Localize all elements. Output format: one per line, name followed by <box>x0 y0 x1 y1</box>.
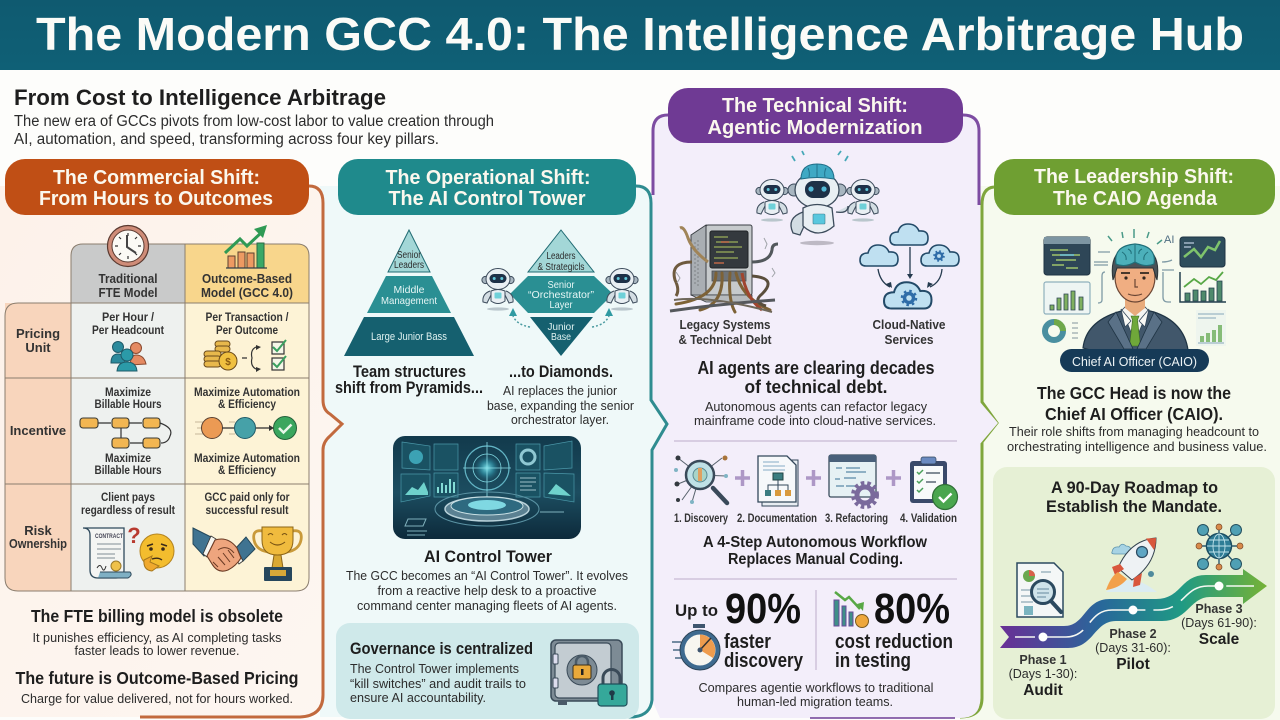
phase 2 label <box>1095 627 1171 673</box>
commercial heading pill: The Commercial Shift: <box>53 166 260 189</box>
icon: robot right <box>606 268 638 311</box>
outcome-based pricing text <box>16 668 298 706</box>
row labels: Risk <box>24 523 52 538</box>
icon: growth chart <box>225 225 267 268</box>
chart: team pyramid: Middle <box>394 284 425 296</box>
CAIO badge <box>1060 349 1209 372</box>
leadership heading pill: The Leadership Shift: <box>1034 165 1234 188</box>
control tower text: from a reactive help desk to a proactive <box>378 583 596 598</box>
chart: team pyramid <box>344 230 474 356</box>
row: incentive <box>80 385 300 477</box>
row: risk ownership: Client pays <box>101 490 155 504</box>
callout: governance: “kill switches” and audit trails to <box>350 676 526 691</box>
icon: audit document <box>1017 563 1063 617</box>
intro text: The new era of GCCs pivots from low-cost labor to value creation through <box>14 113 494 130</box>
icon: people <box>111 342 146 371</box>
icon: coins to checks <box>204 340 286 372</box>
pyramid caption: Team structures <box>353 363 466 381</box>
panel: 90-day roadmap <box>993 467 1275 719</box>
icon: documentation <box>758 456 798 506</box>
phase 2 label: Pilot <box>1116 656 1150 673</box>
icon: contract with question mark: ? <box>127 523 141 548</box>
legacy systems label: & Technical Debt <box>678 332 772 347</box>
chart: team diamond with robots: Senior <box>548 279 575 291</box>
chart: team diamond with robots: & Strategicls <box>538 262 584 273</box>
chart: team pyramid: Management <box>381 295 437 307</box>
row labels <box>9 326 67 551</box>
row labels: Ownership <box>9 536 67 551</box>
icon: coins to checks: $ <box>225 357 231 368</box>
row labels: Incentive <box>10 423 66 438</box>
leadership heading pill <box>994 159 1275 215</box>
intro text: From Cost to Intelligence Arbitrage <box>14 85 386 110</box>
technical debt statement <box>694 358 936 428</box>
icon: AI agent robots <box>756 151 879 245</box>
phase 1 label: Audit <box>1023 682 1063 699</box>
operational heading pill <box>338 159 636 215</box>
FTE billing text: It punishes efficiency, as AI completing tasks <box>32 630 282 645</box>
chart: team diamond with robots: Base <box>551 331 571 343</box>
row: risk ownership <box>81 490 301 581</box>
title banner <box>0 0 1280 70</box>
callout: governance: ensure AI accountability. <box>350 690 486 705</box>
row: incentive: Maximize Automation <box>194 451 300 465</box>
chart: team pyramid: Senior <box>397 250 422 261</box>
legacy systems label <box>678 317 772 347</box>
workflow step labels <box>674 513 957 525</box>
illustration: AI control tower <box>393 436 581 539</box>
technical debt statement: AI agents are clearing decades <box>698 358 934 378</box>
diamond caption: AI replaces the junior <box>503 383 618 398</box>
column headers: Traditional <box>98 271 158 286</box>
icon: stopwatch <box>672 624 720 670</box>
row: pricing unit: Per Headcount <box>92 323 164 337</box>
roadmap heading: A 90-Day Roadmap to <box>1051 479 1218 497</box>
CAIO statement <box>1007 383 1267 454</box>
row: incentive: Billable Hours <box>94 463 162 477</box>
control tower text <box>346 547 628 613</box>
chart: team diamond with robots: Junior <box>548 321 575 333</box>
control tower text: AI Control Tower <box>424 547 552 566</box>
icon: clock <box>108 226 148 266</box>
icon: handshake and trophy <box>193 527 301 581</box>
chart: team pyramid: Leaders <box>394 260 424 271</box>
icon: cloud-native services <box>860 224 959 308</box>
illustration: chief AI officer with dashboards: AI <box>1164 234 1174 246</box>
CAIO statement: Their role shifts from managing headcount to <box>1009 424 1259 439</box>
roadmap heading: Establish the Mandate. <box>1046 498 1222 516</box>
icon: rocket <box>1106 538 1157 592</box>
row: pricing unit: Per Transaction / <box>206 310 289 324</box>
technical heading pill: The Technical Shift: <box>722 94 908 117</box>
plus sign <box>735 470 901 486</box>
technical heading pill: Agentic Modernization <box>708 116 922 139</box>
comparison footnote: human-led migration teams. <box>737 694 893 709</box>
chart: team diamond with robots: Layer <box>550 299 573 311</box>
FTE billing text <box>31 606 283 658</box>
panel: operational shift <box>320 159 667 719</box>
column headers <box>98 271 293 300</box>
chart: team diamond with robots <box>482 230 638 356</box>
row: incentive: Maximize <box>105 385 151 399</box>
phase 1 label: Phase 1 <box>1019 653 1067 667</box>
workflow step labels: 3. Refactoring <box>825 513 888 525</box>
phase 3 label: Scale <box>1199 631 1240 648</box>
legacy systems label: Legacy Systems <box>680 317 770 332</box>
operational heading pill: The Operational Shift: <box>386 166 590 189</box>
cloud-native label: Cloud-Native <box>872 317 946 332</box>
column headers: Outcome-Based <box>202 271 292 286</box>
pyramid caption <box>335 363 483 397</box>
stat: 80 percent cost reduction: 80% <box>874 585 950 633</box>
row: risk ownership: regardless of result <box>81 503 175 517</box>
commercial heading pill <box>5 159 309 215</box>
outcome-based pricing text: Charge for value delivered, not for hours worked. <box>21 691 293 706</box>
workflow step labels: 2. Documentation <box>737 513 817 525</box>
stat: 80 percent cost reduction: in testing <box>835 649 911 672</box>
icon: refactoring <box>829 455 877 507</box>
panel: technical shift <box>652 88 998 718</box>
stat: 90 percent faster discovery <box>672 585 803 672</box>
pyramid caption: shift from Pyramids... <box>335 379 483 397</box>
panel: leadership shift <box>960 159 1280 720</box>
diamond caption <box>487 363 635 427</box>
icon: robot left <box>482 268 514 311</box>
technical debt statement: of technical debt. <box>744 377 888 397</box>
row: pricing unit: Per Outcome <box>216 323 278 337</box>
title banner: The Modern GCC 4.0: The Intelligence Arbitrage Hub <box>36 8 1244 60</box>
chart: team diamond with robots: “Orchestrator” <box>528 290 594 301</box>
roadmap heading <box>1046 479 1222 516</box>
icon: contract with question mark <box>83 523 174 578</box>
intro text: AI, automation, and speed, transforming across four key pillars. <box>14 131 439 148</box>
comparison footnote <box>698 680 934 709</box>
icon: discovery magnifier <box>674 456 728 504</box>
roadmap arrow ribbon <box>1000 569 1267 648</box>
icon: safe with padlocks <box>551 640 627 706</box>
technical debt statement: mainframe code into cloud-native services. <box>694 413 936 428</box>
CAIO statement: Chief AI Officer (CAIO). <box>1045 404 1223 424</box>
row: incentive: Maximize Automation <box>194 385 300 399</box>
diamond caption: ...to Diamonds. <box>509 363 613 381</box>
phase 1 label <box>1009 653 1077 699</box>
stat: 90 percent faster discovery: Up to <box>675 601 718 620</box>
control tower text: The GCC becomes an “AI Control Tower”. It evolves <box>346 568 628 583</box>
cloud-native label: Services <box>884 332 934 347</box>
row: pricing unit <box>92 310 289 372</box>
stat: 80 percent cost reduction <box>834 585 953 672</box>
intro text <box>14 85 494 148</box>
stat: 90 percent faster discovery: faster <box>724 630 771 653</box>
diamond caption: orchestrator layer. <box>511 412 609 427</box>
growth arrows <box>509 308 613 327</box>
row: incentive: Billable Hours <box>94 397 162 411</box>
callout: governance <box>336 623 639 719</box>
phase 2 label: Phase 2 <box>1109 627 1157 641</box>
leadership heading pill: The CAIO Agenda <box>1053 187 1218 210</box>
commercial heading pill: From Hours to Outcomes <box>39 187 273 210</box>
row: incentive: & Efficiency <box>218 463 276 477</box>
stat: 90 percent faster discovery: 90% <box>725 585 801 633</box>
workflow heading: Replaces Manual Coding. <box>728 551 903 568</box>
comparison footnote: Compares agentie workflows to traditional <box>698 680 934 695</box>
cloud-native label <box>872 317 946 347</box>
workflow heading: A 4-Step Autonomous Workflow <box>703 534 928 551</box>
icon: validation clipboard <box>910 457 958 510</box>
stat: 90 percent faster discovery: discovery <box>724 649 803 672</box>
outcome-based pricing text: The future is Outcome-Based Pricing <box>16 668 298 688</box>
chart: team diamond with robots: Leaders <box>546 251 576 262</box>
comparison table <box>5 225 309 591</box>
technical heading pill <box>668 88 963 143</box>
control tower text: command center managing fleets of AI agents. <box>357 598 617 613</box>
illustration: chief AI officer with dashboards <box>1044 229 1226 350</box>
icon: contract with question mark: CONTRACT <box>95 534 123 540</box>
phase 2 label: (Days 31-60): <box>1095 641 1171 655</box>
row labels: Unit <box>25 340 51 355</box>
FTE billing text: faster leads to lower revenue. <box>74 643 240 658</box>
column headers: FTE Model <box>98 285 158 300</box>
CAIO statement: orchestrating intelligence and business value. <box>1007 439 1267 454</box>
callout: governance: The Control Tower implements <box>350 661 519 676</box>
icon: falling cost chart <box>834 592 868 628</box>
phase 3 label: (Days 61-90): <box>1181 616 1257 630</box>
panel: commercial shift <box>0 159 342 717</box>
FTE billing text: The FTE billing model is obsolete <box>31 606 283 626</box>
technical debt statement: Autonomous agents can refactor legacy <box>705 399 927 414</box>
row: incentive: Maximize <box>105 451 151 465</box>
row: incentive: & Efficiency <box>218 397 276 411</box>
CAIO badge: Chief AI Officer (CAIO) <box>1072 354 1197 369</box>
row: pricing unit: Per Hour / <box>102 310 155 324</box>
workflow heading <box>703 534 928 568</box>
row: risk ownership: GCC paid only for <box>204 490 290 504</box>
chart: team pyramid: Large Junior Bass <box>371 331 447 343</box>
phase 3 label: Phase 3 <box>1195 602 1243 616</box>
operational heading pill: The AI Control Tower <box>388 187 586 210</box>
CAIO statement: The GCC Head is now the <box>1037 383 1231 403</box>
phase 3 label <box>1181 602 1257 648</box>
callout: governance: Governance is centralized <box>350 640 533 658</box>
stat: 80 percent cost reduction: cost reduction <box>835 630 953 653</box>
icon: billable hours loop <box>80 418 171 448</box>
column headers: Model (GCC 4.0) <box>201 285 293 300</box>
icon: automation flow <box>195 416 296 440</box>
diamond caption: base, expanding the senior <box>487 398 635 413</box>
icon: global network <box>1196 524 1243 570</box>
row: risk ownership: successful result <box>206 503 289 517</box>
row labels: Pricing <box>16 326 60 341</box>
phase 1 label: (Days 1-30): <box>1009 667 1077 681</box>
workflow step labels: 4. Validation <box>900 513 957 525</box>
icon: legacy server with tangled cables <box>670 225 778 312</box>
workflow step labels: 1. Discovery <box>674 513 728 525</box>
